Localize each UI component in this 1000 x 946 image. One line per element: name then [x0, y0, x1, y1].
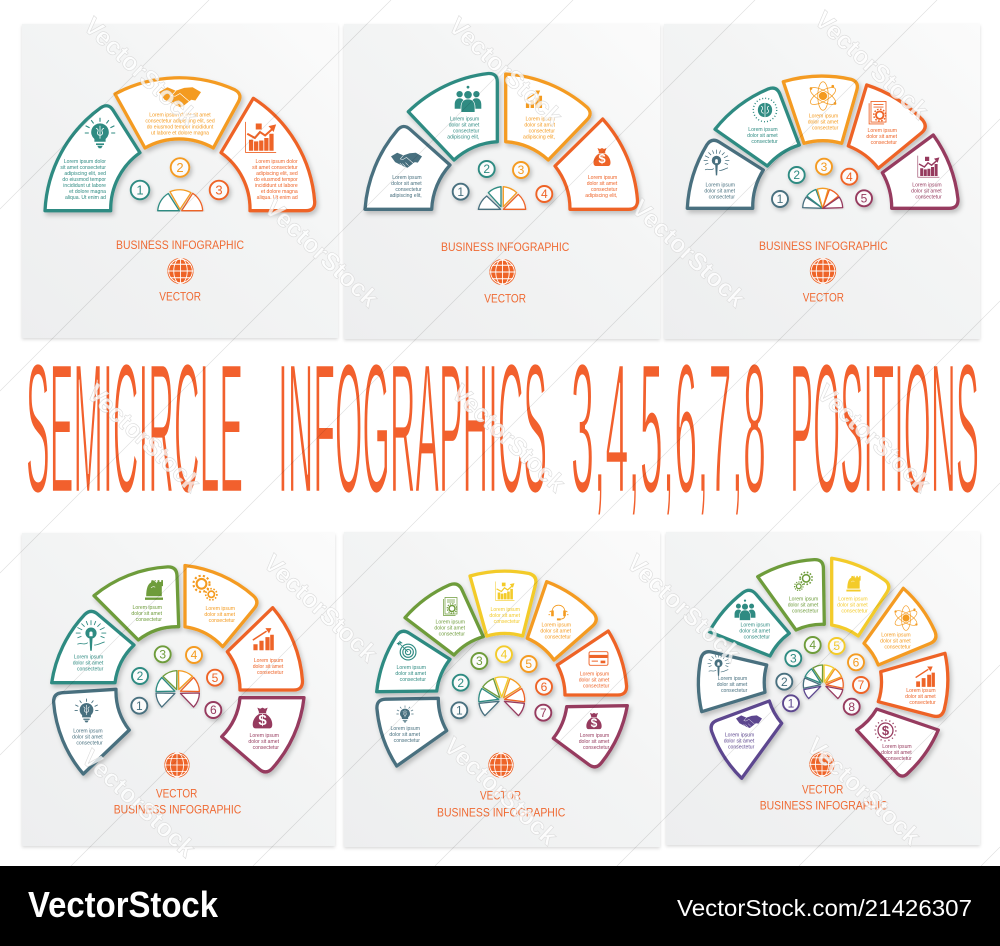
- segment 7 red-orange: Lorem ipsum: [906, 688, 936, 694]
- segment 3 teal: consectetur: [744, 634, 770, 640]
- segment 6 red-orange: Lorem ipsum: [580, 672, 609, 678]
- segment 1 slate: [54, 689, 129, 774]
- segment 1 slate: consectetur: [709, 194, 735, 200]
- segment 2 teal: Lorem ipsum: [74, 654, 103, 660]
- segment 4 yellow: Lorem ipsum: [491, 607, 520, 613]
- segment 7 maroon: consectetur: [583, 745, 610, 751]
- segment 5 red-orange: dolor sit amet: [253, 664, 284, 670]
- segment 3 orange: dolor sit amet: [524, 122, 556, 128]
- watermark: VectorStock: [76, 744, 201, 863]
- segment 5 red-orange: consectetur: [257, 670, 284, 676]
- segment 1 teal: [45, 106, 140, 211]
- caption: vector: VECTOR: [480, 789, 521, 803]
- segment 2 teal: Lorem ipsum: [397, 665, 426, 671]
- segment 1 slate: [377, 698, 447, 766]
- segment 5 orange: consectetur: [545, 634, 571, 640]
- segment 4 red-orange: dolor sit amet: [866, 134, 898, 140]
- segment 4 orange: [185, 566, 257, 647]
- number badges: 6: [541, 680, 548, 694]
- segment 1 slate: consectetur: [394, 738, 420, 744]
- segment 1 teal: et dolore magna: [69, 189, 106, 195]
- segment 2 slate: dolor sit amet: [717, 682, 748, 688]
- watermark: VectorStock: [446, 379, 571, 498]
- segment 6 maroon: Lorem ipsum: [250, 733, 279, 739]
- number badges: 1: [456, 703, 463, 717]
- segment 4 yellow: [470, 571, 536, 636]
- segment 3 teal: [709, 590, 789, 656]
- segment 2 slate: Lorem ipsum: [718, 676, 747, 682]
- watermark: VectorStock: [443, 12, 568, 131]
- segment 1 slate: [687, 140, 763, 208]
- segment 2 orange: Lorem ipsum dolor sit amet: [149, 112, 211, 118]
- segment 3 teal: Lorem ipsum: [741, 622, 770, 628]
- segment 4 red-orange: adipiscing elit,: [585, 193, 617, 199]
- number badges: 6: [853, 655, 860, 669]
- watermark: VectorStock: [81, 379, 206, 498]
- caption: vector: VECTOR: [802, 782, 844, 796]
- segment 1 slate: adipiscing elit,: [390, 193, 422, 199]
- segment 4 red-orange: $: [598, 151, 606, 166]
- segment 3 red-orange: incididunt ut labore: [255, 183, 298, 189]
- number badges: [453, 161, 552, 202]
- segment 3 orange: Lorem ipsum: [809, 114, 838, 120]
- segment 3 orange: consectetur: [529, 128, 555, 134]
- segment 3 red-orange: et dolore magna: [261, 189, 298, 195]
- segment 4 green: consectetur: [792, 608, 819, 614]
- segment 3 orange: [783, 76, 857, 143]
- number badges: 3: [215, 183, 223, 198]
- segment 2 teal: [52, 611, 134, 683]
- icon: globe: [164, 752, 190, 778]
- segment 4 red-orange: dolor sit amet: [587, 181, 618, 187]
- segment 5 yellow: Lorem ipsum: [838, 596, 868, 602]
- segment 3 green: dolor sit amet: [434, 626, 466, 632]
- segment 7 maroon: Lorem ipsum: [580, 733, 609, 739]
- segment 3 red-orange: sit amet consectetur: [252, 165, 298, 171]
- number badges: [772, 159, 872, 207]
- segment 5 yellow: consectetur: [841, 608, 868, 614]
- segment 8 maroon: Lorem ipsum: [882, 744, 912, 750]
- number badges: 2: [137, 669, 144, 683]
- watermark: VectorStock: [621, 549, 746, 668]
- number badges: 4: [501, 647, 508, 661]
- segment 4 red-orange: consectetur: [871, 140, 897, 146]
- segment 6 maroon: dolor sit amet: [248, 739, 280, 745]
- segment 4 orange: Lorem ipsum: [206, 606, 235, 612]
- number badges: 3: [476, 654, 483, 668]
- caption: business infographic: BUSINESS INFOGRAPHIC: [759, 239, 888, 253]
- segment 5 red-orange: [227, 608, 303, 690]
- segment 8 maroon: $: [882, 723, 890, 738]
- segment 2 slate: [698, 652, 767, 712]
- number badges: 2: [176, 160, 184, 175]
- number badges: 4: [191, 648, 198, 662]
- panel: 7 positions: [344, 532, 660, 847]
- segment 7 maroon: $: [591, 716, 598, 730]
- segment 5 orange: dolor sit amet: [540, 628, 572, 634]
- segment 3 red-orange: do eiusmod tempor: [254, 177, 298, 183]
- caption: business infographic: BUSINESS INFOGRAPHIC: [114, 803, 242, 817]
- segment 2 teal: dolor sit amet: [395, 671, 427, 677]
- segment 4 red-orange: Lorem ipsum: [588, 175, 617, 181]
- icon: globe: [488, 752, 514, 778]
- segment 2 orange: [115, 78, 240, 148]
- segment 7 red-orange: dolor sit amet: [905, 694, 936, 700]
- segment 3 green: [405, 584, 483, 655]
- segment 4 red-orange: [848, 85, 925, 168]
- icon: globe: [810, 258, 836, 284]
- segment 4 yellow: dolor sit amet: [489, 613, 521, 619]
- segment 3 red-orange: [221, 98, 315, 211]
- segment 2 teal: consectetur: [751, 139, 778, 145]
- segment 3 green: Lorem ipsum: [436, 620, 465, 626]
- watermark: [76, 6, 936, 863]
- segment 5 yellow: dolor sit amet: [837, 602, 868, 608]
- caption: vector: VECTOR: [803, 291, 844, 305]
- segment 5 maroon: Lorem ipsum: [912, 182, 942, 188]
- segment 1 slate: Lorem ipsum: [73, 728, 103, 734]
- segment 5 red-orange: Lorem ipsum: [254, 658, 283, 664]
- segment 1 slate: Lorem ipsum: [391, 726, 420, 732]
- watermark: VectorStock: [626, 194, 751, 313]
- segment 2 teal: consectetur: [453, 128, 480, 134]
- number badges: 5: [861, 191, 868, 205]
- segment 6 orange: [864, 588, 936, 665]
- segment 4 green: [758, 560, 824, 630]
- segment 6 maroon: $: [258, 712, 267, 729]
- segment 1 teal: do eiusmod tempor: [62, 177, 106, 183]
- segment 3 red-orange: aliqua. Ut enim ad: [257, 195, 298, 201]
- segment 1 slate: consectetur: [76, 740, 103, 746]
- segment 1 slate: Lorem ipsum: [706, 182, 735, 188]
- segment 8 maroon: dolor sit amet: [881, 750, 912, 756]
- segment 2 teal: dolor sit amet: [747, 133, 778, 139]
- watermark: VectorStock: [258, 549, 383, 668]
- segment 6 red-orange: dolor sit amet: [579, 678, 610, 684]
- segment 3 red-orange: Lorem ipsum dolor: [256, 159, 298, 165]
- segment 3 orange: consectetur: [812, 126, 839, 132]
- segment 7 red-orange: [878, 653, 948, 716]
- segment 6 orange: dolor sit amet: [880, 638, 911, 644]
- number badges: 3: [790, 651, 797, 665]
- number badges: 5: [525, 657, 532, 671]
- footer bar: [0, 866, 1000, 946]
- segment 3 green: consectetur: [136, 617, 162, 623]
- segment 1 teal: sit amet consectetur: [60, 165, 106, 171]
- segment 2 teal: consectetur: [400, 677, 426, 683]
- segment 8 maroon: [857, 709, 938, 776]
- segment 1 teal: Lorem ipsum dolor: [64, 159, 106, 165]
- mini pie: [803, 665, 843, 699]
- segment 4 yellow: consectetur: [494, 619, 520, 625]
- number badges: 4: [541, 187, 548, 201]
- segment 6 red-orange: [557, 631, 627, 695]
- segment 3 red-orange: adipiscing elit, sed: [256, 171, 298, 177]
- segment 1 teal: adipiscing elit, sed: [64, 171, 106, 177]
- segment 2 teal: [408, 73, 497, 160]
- icon: globe: [809, 752, 835, 777]
- segment 6 orange: Lorem ipsum: [881, 632, 911, 638]
- segment 3 green: Lorem ipsum: [133, 605, 162, 611]
- segment 8 maroon: consectetur: [885, 756, 912, 762]
- panel: 6 positions: [22, 533, 335, 846]
- segment 5 yellow: [832, 558, 889, 636]
- segment 3 green: dolor sit amet: [131, 611, 163, 617]
- number badges: 2: [781, 675, 788, 689]
- caption: vector: VECTOR: [156, 787, 198, 801]
- segment 1 purple: consectetur: [728, 744, 755, 750]
- segment 1 slate: consectetur: [395, 187, 422, 193]
- segment 2 teal: dolor sit amet: [73, 660, 104, 666]
- segment 7 red-orange: consectetur: [909, 700, 936, 706]
- segment 2 teal: consectetur: [77, 666, 104, 672]
- segment 5 orange: Lorem ipsum: [542, 622, 571, 628]
- watermark: VectorStock: [809, 6, 934, 125]
- segment 1 slate: dolor sit amet: [704, 188, 736, 194]
- mini semicircle: [478, 187, 526, 209]
- mini pie: [156, 671, 199, 707]
- segment 4 red-orange: [555, 119, 638, 209]
- caption: business infographic: BUSINESS INFOGRAPHIC: [116, 238, 244, 252]
- watermark: VectorStock: [801, 732, 926, 851]
- number badges: [131, 158, 228, 199]
- number badges: 2: [793, 168, 800, 182]
- segment 4 red-orange: Lorem ipsum: [868, 128, 897, 134]
- segment 1 purple: dolor sit amet: [724, 738, 755, 744]
- number badges: 2: [457, 676, 464, 690]
- number badges: 1: [777, 192, 784, 206]
- panel: 8 positions: [666, 532, 980, 845]
- segment 2 slate: consectetur: [721, 688, 748, 694]
- watermark: VectorStock: [811, 379, 936, 498]
- segment 2 teal: dolor sit amet: [449, 122, 480, 128]
- watermark: VectorStock: [259, 194, 384, 313]
- segment 1 slate: dolor sit amet: [389, 732, 421, 738]
- number badges: 6: [210, 703, 217, 717]
- segment 4 green: dolor sit amet: [788, 602, 819, 608]
- footer logo: VectorStock: [28, 884, 219, 925]
- segment 2 teal: Lorem ipsum: [748, 127, 778, 133]
- segment 2 teal: [715, 88, 799, 166]
- segment 6 maroon: [222, 698, 304, 772]
- segment 2 teal: adipiscing elit,: [447, 134, 479, 140]
- panel: 3 positions: [22, 24, 338, 338]
- segment 5 orange: [527, 582, 596, 660]
- segment 4 orange: consectetur: [209, 618, 235, 624]
- number badges: 7: [858, 678, 865, 692]
- panel: 4 positions: [344, 24, 660, 339]
- segment 3 green: consectetur: [439, 632, 465, 638]
- watermark: VectorStock: [78, 12, 203, 131]
- number badges: [776, 637, 869, 715]
- segment 1 purple: Lorem ipsum: [725, 732, 754, 738]
- number badges: 3: [159, 647, 166, 661]
- segment 3 orange: [506, 74, 590, 160]
- caption: vector: VECTOR: [159, 290, 201, 304]
- mini pie: [479, 677, 525, 716]
- caption: business infographic: BUSINESS INFOGRAPHIC: [441, 240, 570, 254]
- segment 2 orange: consectetur adipiscing elit, sed: [145, 118, 215, 124]
- number badges: 3: [518, 163, 525, 177]
- caption: business infographic: BUSINESS INFOGRAPHIC: [437, 805, 566, 819]
- segment 7 maroon: [553, 706, 627, 767]
- number badges: 2: [483, 162, 490, 176]
- segment 1 slate: Lorem ipsum: [392, 175, 422, 181]
- number badges: [451, 646, 552, 721]
- icon: globe: [489, 259, 516, 285]
- number badges: 4: [809, 638, 816, 652]
- segment 1 purple: [711, 701, 782, 778]
- segment 3 teal: dolor sit amet: [739, 628, 771, 634]
- segment 1 slate: dolor sit amet: [72, 734, 103, 740]
- segment 2 teal: [377, 631, 450, 692]
- number badges: 4: [846, 170, 853, 184]
- segment 5 maroon: [882, 135, 958, 208]
- segment 1 teal: incididunt ut labore: [63, 183, 106, 189]
- mini semicircle: [803, 188, 843, 208]
- segment 2 orange: ut labore et dolore magna: [151, 130, 209, 136]
- number badges: 3: [821, 160, 828, 174]
- number badges: 5: [833, 639, 840, 653]
- segment 7 maroon: dolor sit amet: [579, 739, 610, 745]
- segment 5 maroon: dolor sit amet: [911, 188, 942, 194]
- segment 4 orange: dolor sit amet: [204, 612, 236, 618]
- segment 2 orange: do eiusmod tempor incididunt: [147, 124, 214, 130]
- number badges: 8: [848, 700, 855, 714]
- segment 5 maroon: consectetur: [915, 194, 942, 200]
- segment 3 orange: Lorem ipsum: [526, 116, 555, 122]
- panel: 5 positions: [664, 24, 980, 339]
- segment 6 maroon: consectetur: [253, 745, 279, 751]
- footer image id: VectorStock.com/21426307: [677, 895, 972, 921]
- number badges: 1: [457, 185, 464, 199]
- caption: business infographic: BUSINESS INFOGRAPHIC: [760, 798, 888, 812]
- segment 1 slate: [365, 126, 450, 209]
- segment 1 teal: aliqua. Ut enim ad: [65, 195, 106, 201]
- watermark: VectorStock: [438, 732, 563, 851]
- segment 3 orange: adipiscing elit,: [523, 134, 555, 140]
- segment 4 red-orange: consectetur: [591, 187, 618, 193]
- number badges: 7: [540, 706, 547, 720]
- segment 6 orange: consectetur: [884, 644, 911, 650]
- segment 6 red-orange: consectetur: [583, 684, 610, 690]
- icon: globe: [167, 258, 194, 284]
- segment 2 teal: Lorem ipsum: [450, 116, 479, 122]
- mini semicircle: [158, 190, 203, 211]
- segment 3 green: [94, 567, 179, 640]
- segment 3 orange: dolor sit amet: [808, 120, 839, 126]
- caption: vector: VECTOR: [484, 292, 526, 306]
- segment 1 slate: dolor sit amet: [391, 181, 422, 187]
- number badges: [131, 646, 223, 718]
- segment 4 green: Lorem ipsum: [789, 596, 818, 602]
- number badges: 1: [788, 696, 795, 710]
- number badges: 1: [136, 699, 143, 713]
- number badges: 5: [212, 671, 219, 685]
- number badges: 1: [136, 183, 144, 198]
